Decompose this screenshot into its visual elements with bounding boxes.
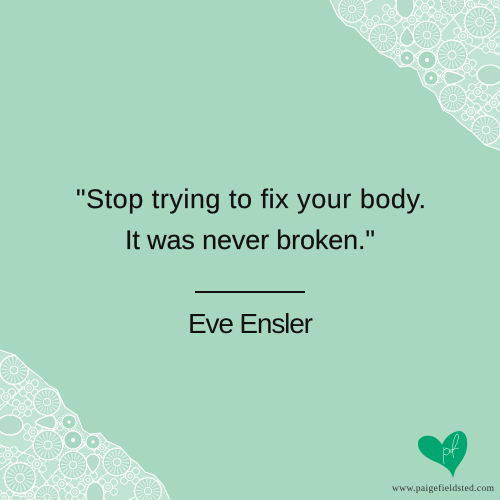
- lace ovals: [396, 0, 500, 85]
- quote line 1: "Stop trying to fix your body.: [76, 184, 426, 214]
- lace corner: top right: [320, 0, 500, 160]
- quote line 2: It was never broken.": [125, 225, 375, 255]
- author name: Eve Ensler: [188, 308, 313, 339]
- lace corner: bottom left: [0, 340, 180, 500]
- icon: heart logo: [418, 431, 467, 478]
- website url: www.paigefieldsted.com: [392, 483, 495, 494]
- divider rule: [195, 291, 305, 293]
- lace scalloped edge: [330, 0, 500, 150]
